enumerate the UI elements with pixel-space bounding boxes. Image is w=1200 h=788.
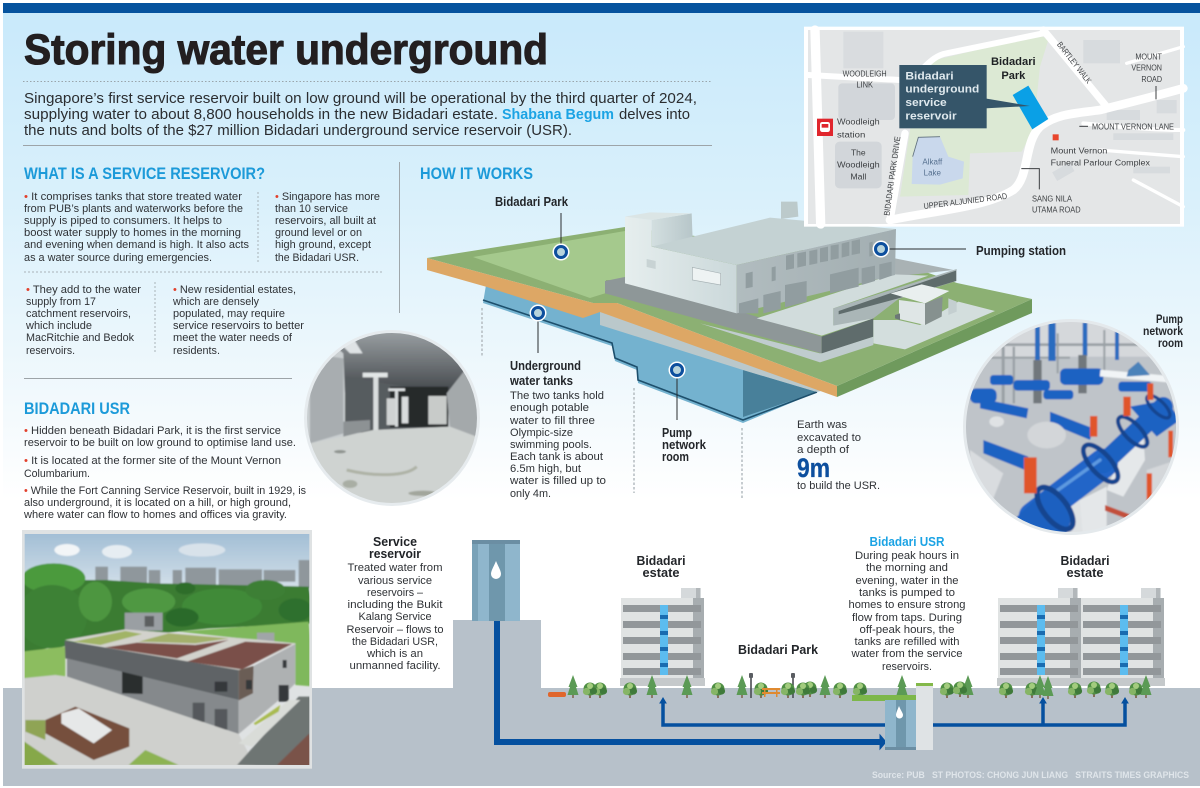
label: Bidadari Park: Bidadari Park: [738, 643, 818, 657]
bullet: more than 10: reservoirs, all built at: [275, 215, 376, 227]
label: Pump network room photo: [1143, 314, 1184, 350]
text: Bidadari USR operation: Bidadari USR: [870, 535, 944, 549]
heading: what is a service reservoir: WHAT IS A SERVICE RESERVOIR?: [24, 165, 265, 183]
text: underground water tanks: swimming pools.: [510, 439, 592, 451]
photo: pumping station exterior: [17, 530, 315, 769]
text: underground water tanks: Olympic-size: [510, 427, 573, 439]
marker: pump room: [668, 362, 686, 420]
park trees and street furniture: [548, 673, 1152, 699]
bullet: new estates: which are densely: [172, 296, 259, 308]
text: Bidadari USR operation: off-peak hours, the: [860, 624, 954, 636]
marker: Bidadari Park: [552, 213, 570, 260]
callout: 9m excavation: 9m: [797, 453, 830, 483]
bullet: catchment reservoirs: which include: [25, 320, 92, 332]
label: Pump network room: network: [662, 438, 706, 452]
Alkaff Lake: Alkaff: [922, 158, 943, 167]
text: Bidadari USR operation: evening, water in the: [856, 575, 958, 587]
text: Bidadari USR operation: [848, 535, 966, 673]
Alkaff Lake: Lake: [924, 168, 942, 177]
bullet: tanks: boost water supply to homes in the morning: [24, 227, 241, 239]
map labels: MOUNT VERNON LANE: [1092, 122, 1174, 132]
text: service reservoir: reservoir: [369, 547, 421, 561]
distribution pipes with arrows: [660, 698, 1128, 725]
text: Bidadari USR operation: During peak hours in: [855, 550, 959, 562]
label: Bidadari Park: Bidadari Park: [495, 195, 568, 209]
photo: pump network room: [963, 319, 1179, 535]
map labels: LINK: [856, 79, 873, 89]
bullet: more than 10: ground level or on: [275, 227, 362, 239]
text: service reservoir: various service: [358, 575, 432, 587]
text: underground water tanks: water is filled up to: [509, 475, 606, 487]
text: underground water tanks: Underground: [510, 359, 581, 373]
map labels: Mount Vernon: [1051, 145, 1108, 155]
main feed pipe with arrow: [497, 621, 886, 749]
bullet: new estates: • New residential estates,: [173, 284, 296, 296]
roads: [808, 30, 1183, 224]
label: Bidadari estate right: estate: [1066, 566, 1104, 580]
bullet: more than 10: high ground, except: [275, 239, 371, 251]
map labels: WOODLEIGH: [843, 69, 887, 79]
bullet list: • It is located at the former site of the Mount Vernon: [24, 455, 281, 467]
title: Storing water underground: [24, 26, 548, 74]
bullet: tanks: [24, 191, 249, 264]
callout box: Bidadari: [905, 71, 954, 83]
text: underground water tanks: 6.5m high, but: [510, 463, 581, 475]
heading: Bidadari USR: BIDADARI USR: [24, 400, 130, 418]
estate buildings, right: [997, 588, 1165, 686]
text: service reservoir: [346, 535, 444, 672]
bullet list: Columbarium.: [24, 468, 90, 480]
text: Bidadari USR operation: homes to ensure strong: [848, 599, 966, 611]
bullet list: where water can flow to homes and offices via gravity.: [23, 509, 287, 521]
label: Pump network room: Pump: [662, 426, 692, 440]
map labels: The: [851, 147, 866, 157]
introduction text: supplying water to about 8,800 households in the new Bidadari estate.: [24, 106, 498, 123]
marker: pumping station: [872, 240, 966, 258]
Bidadari USR tank below park: [852, 683, 933, 750]
bullet: catchment reservoirs: catchment reservoirs,: [26, 308, 131, 320]
bullet: tanks: as a water source during emergencies.: [24, 252, 212, 264]
label: Bidadari estate right: [1060, 554, 1110, 580]
text: underground water tanks: The two tanks hold: [510, 390, 604, 402]
text: Bidadari USR operation: reservoirs.: [882, 661, 932, 673]
label: Pumping station: Pumping station: [976, 244, 1066, 258]
map labels: [837, 40, 1174, 216]
callout: 9m excavation: excavated to: [797, 432, 861, 444]
location map: [804, 27, 1184, 227]
callout: 9m excavation: Earth was: [797, 419, 847, 431]
bullet: catchment reservoirs: • They add to the water: [26, 284, 141, 296]
bullet: catchment reservoirs: [25, 284, 141, 357]
label: Bidadari Park: Park: [1001, 70, 1026, 82]
bullet: tanks: • It comprises tanks that store treated water: [24, 191, 242, 203]
map labels: Mall: [850, 171, 866, 181]
text: underground water tanks: [509, 359, 606, 500]
photo: inside the tank: [304, 330, 480, 506]
bullet: new estates: populated, may require: [173, 308, 285, 320]
map labels: BARTLEY WALK: [1055, 40, 1094, 86]
bullet: more than 10: the Bidadari USR.: [275, 252, 359, 264]
map labels: MOUNT: [1135, 51, 1162, 61]
text: service reservoir: reservoirs –: [367, 587, 424, 599]
bullet: more than 10: • Singapore has more: [275, 191, 380, 203]
introduction text: the nuts and bolts of the $27 million Bidadari underground service reservoir (USR).: [24, 122, 572, 139]
estate building, left: [620, 588, 705, 686]
map labels: station: [837, 129, 866, 139]
text: underground water tanks: water to fill three: [509, 415, 595, 427]
panel: Bidadari USR facts: [23, 400, 306, 521]
text: underground water tanks: enough potable: [510, 402, 589, 414]
pumping station building: [605, 202, 995, 362]
label: Bidadari estate left: Bidadari: [636, 554, 686, 568]
bullet list: [23, 425, 306, 521]
text: underground water tanks: water tanks: [509, 374, 573, 388]
callout box: reservoir: [905, 110, 957, 122]
bullet: catchment reservoirs: reservoirs.: [26, 345, 75, 357]
bullet: tanks: and evening when demand is high. It also acts: [24, 239, 249, 251]
text: Bidadari USR operation: flow from taps. During: [852, 612, 962, 624]
label: Pump network room photo: Pump: [1156, 314, 1183, 326]
introduction text: delves into: [619, 106, 690, 123]
callout: 9m excavation: to build the USR.: [797, 480, 880, 492]
text: Bidadari USR operation: tanks is pumped to: [859, 587, 955, 599]
MRT station icon: [817, 119, 833, 136]
label: Pump network room: [662, 426, 706, 464]
map labels: VERNON: [1131, 63, 1162, 73]
label: Bidadari Park: Bidadari: [991, 56, 1036, 68]
bullet list: reservoir to be built on low ground to optimise land use.: [24, 437, 296, 449]
callout: 9m excavation: [797, 419, 880, 492]
bullet: more than 10: [275, 191, 380, 264]
map labels: Funeral Parlour Complex: [1051, 157, 1151, 167]
introduction text: Singapore’s first service reservoir built on low ground will be operational by the third quarter of 2024,: [24, 90, 697, 107]
panel: what is a service reservoir: [24, 165, 383, 357]
label: Pump network room: room: [662, 450, 689, 464]
bullet list: • Hidden beneath Bidadari Park, it is the first service: [24, 425, 281, 437]
bullet: new estates: service reservoirs to better: [173, 320, 304, 332]
map labels: SANG NILA: [1032, 194, 1072, 204]
callout box: service: [905, 97, 947, 109]
text: underground water tanks: Each tank is about: [510, 451, 603, 463]
text: service reservoir: which is an: [366, 648, 423, 660]
map labels: BIDADARI PARK DRIVE: [881, 135, 902, 216]
introduction text: Shabana Begum: [502, 106, 614, 123]
text: service reservoir: including the Bukit: [348, 599, 442, 611]
ground: [3, 620, 1200, 786]
bullet list: • While the Fort Canning Service Reservoir, built in 1929, is: [24, 485, 306, 497]
text: service reservoir: Reservoir – flows to: [346, 624, 444, 636]
bullet list: also underground, it is located on a hill, or high ground,: [24, 497, 291, 509]
map labels: UPPER ALJUNIED ROAD: [923, 191, 1008, 211]
bullet: new estates: [172, 284, 304, 357]
bullet: new estates: residents.: [173, 345, 220, 357]
top colour band: [3, 3, 1200, 13]
callout box: underground: [905, 84, 979, 96]
callout box: [899, 65, 1030, 128]
marker: water tanks: [530, 304, 546, 353]
text: service reservoir: Service: [373, 535, 417, 549]
map labels: ROAD: [1141, 74, 1162, 84]
bullet: catchment reservoirs: supply from 17: [26, 296, 96, 308]
label: Bidadari estate left: estate: [642, 566, 680, 580]
service reservoir tank: [472, 540, 520, 621]
bullet: tanks: from PUB’s plants and waterworks before the: [24, 203, 243, 215]
text: Bidadari USR operation: the morning and: [866, 562, 948, 574]
3D cutaway model of the reservoir: [427, 202, 1032, 423]
label: Bidadari estate left: [636, 554, 686, 580]
label: Pump network room photo: room: [1158, 338, 1183, 350]
text: underground water tanks: only 4m.: [510, 488, 551, 500]
bullet: catchment reservoirs: MacRitchie and Bedok: [26, 332, 134, 344]
map labels: UTAMA ROAD: [1032, 205, 1081, 215]
park and blocks: [835, 32, 1177, 197]
text: Bidadari USR operation: water from the service: [850, 648, 962, 660]
label: Bidadari Park: [991, 56, 1036, 82]
reservoir location: [1013, 86, 1048, 129]
callout: 9m excavation: a depth of: [797, 444, 850, 456]
text: Bidadari USR operation: tanks are refilled with: [854, 636, 960, 648]
bullet: tanks: supply is piped to consumers. It helps to: [24, 215, 222, 227]
label: Bidadari estate right: Bidadari: [1060, 554, 1110, 568]
introduction text: [24, 90, 697, 139]
map labels: Woodleigh: [837, 117, 880, 127]
text: service reservoir: the Bidadari USR,: [352, 636, 438, 648]
text: service reservoir: Treated water from: [348, 562, 442, 574]
label: Pump network room photo: network: [1143, 326, 1184, 338]
bullet: new estates: meet the water needs of: [173, 332, 293, 344]
text: service reservoir: unmanned facility.: [350, 660, 440, 672]
map labels: Woodleigh: [837, 159, 880, 169]
heading: how it works: HOW IT WORKS: [420, 165, 533, 183]
ground slab: [427, 227, 1032, 397]
tank body: [483, 285, 825, 423]
bullet: more than 10: than 10 service: [275, 203, 348, 215]
Alkaff Lake: [912, 137, 964, 185]
text: service reservoir: Kalang Service: [358, 611, 432, 623]
